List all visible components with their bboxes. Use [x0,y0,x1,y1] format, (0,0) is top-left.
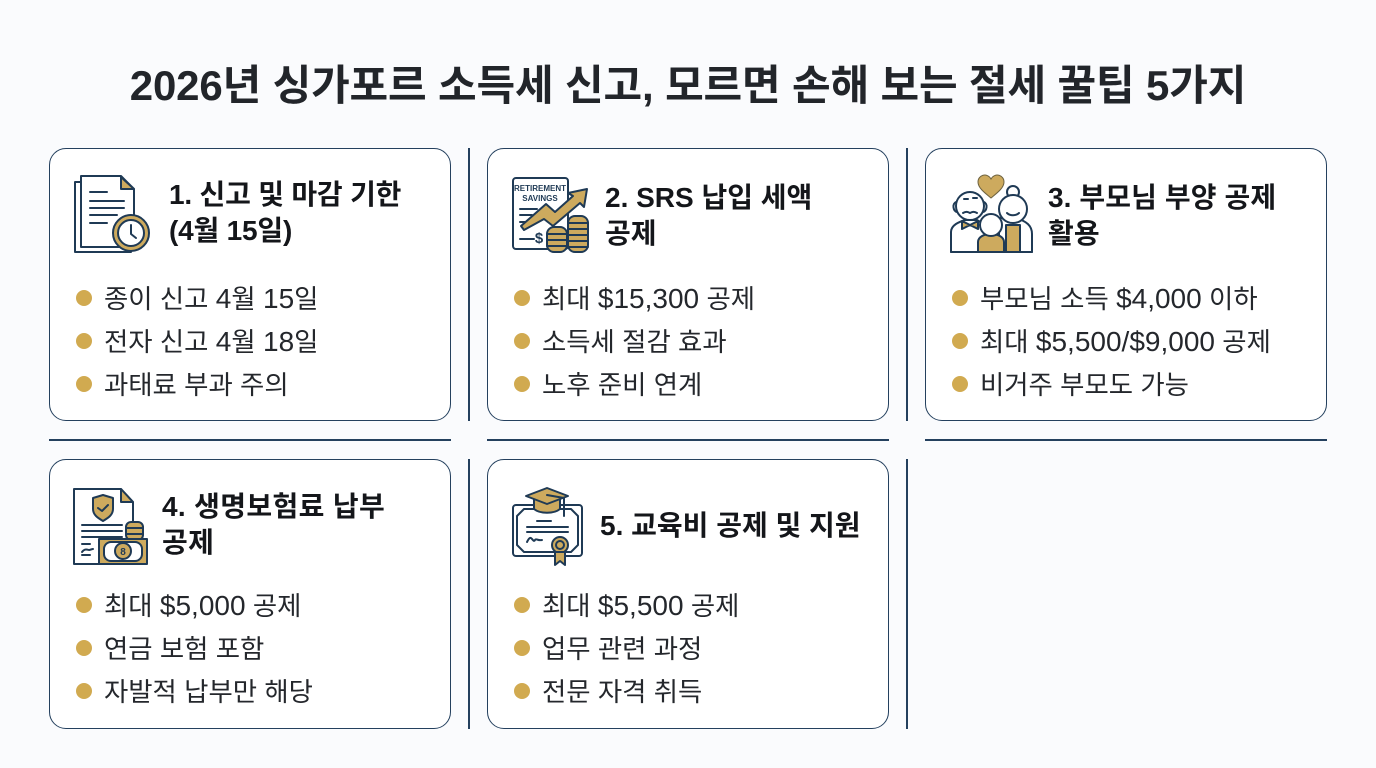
heading: 4. 생명보험료 납부 [162,491,385,522]
heading: 5. 교육비 공제 및 지원 [600,510,861,541]
heading [1048,182,1276,249]
heading: 2. SRS 납입 세액 [605,182,812,213]
bullet list: 최대 $5,000 공제 [104,590,301,621]
bullet list [514,283,755,400]
heading: 1. 신고 및 마감 기한 [169,179,401,210]
bullet list: 최대 $5,500 공제 [542,590,739,621]
bullet list [514,590,739,707]
bullet list [952,283,1271,400]
bullet list: 부모님 소득 $4,000 이하 [980,283,1258,314]
bullet list: 종이 신고 4월 15일 [104,283,318,314]
bullet list: 비거주 부모도 가능 [980,370,1189,400]
heading [162,491,385,558]
bullet list: 연금 보험 포함 [104,634,264,664]
bullet list: 최대 $5,500/$9,000 공제 [980,326,1271,357]
heading: 공제 [162,527,214,558]
heading: (4월 15일) [169,215,292,246]
panel: 2. SRS contribution [487,148,889,421]
bullet list: 노후 준비 연계 [542,370,702,400]
bullet list: 과태료 부과 주의 [104,370,289,400]
icon: document with clock [74,175,150,253]
icon: diploma with graduation cap [512,487,583,566]
icon: retirement savings: $ [535,230,544,247]
heading: 활용 [1048,218,1100,249]
heading: 공제 [605,218,657,249]
icon: insurance policy with cash: 8 [120,547,126,558]
bullet list: 전문 자격 취득 [542,677,702,707]
bullet list: 자발적 납부만 해당 [104,677,313,707]
bullet list: 소득세 절감 효과 [542,327,727,357]
icon: retirement savings: RETIREMENT [514,184,566,193]
panel: 3. parent relief [925,148,1327,421]
bullet list: 업무 관련 과정 [542,634,702,664]
bullet list [76,283,318,400]
bullet list: 최대 $15,300 공제 [542,283,755,314]
icon: retirement savings [512,177,589,253]
bullet list: 전자 신고 4월 18일 [104,326,318,357]
icon: family with heart [950,174,1033,253]
icon: insurance policy with cash [73,488,148,565]
title: 2026년 싱가포르 소득세 신고, 모르면 손해 보는 절세 꿀팁 5가지 [130,62,1246,109]
heading: 3. 부모님 부양 공제 [1048,182,1276,213]
panel: 1. filing deadline [49,148,451,421]
bullet list [76,590,313,707]
icon: retirement savings: SAVINGS [522,194,558,203]
heading [169,179,401,246]
heading [605,182,812,249]
panel: 5. education [487,459,889,729]
panel: 4. life insurance [49,459,451,729]
